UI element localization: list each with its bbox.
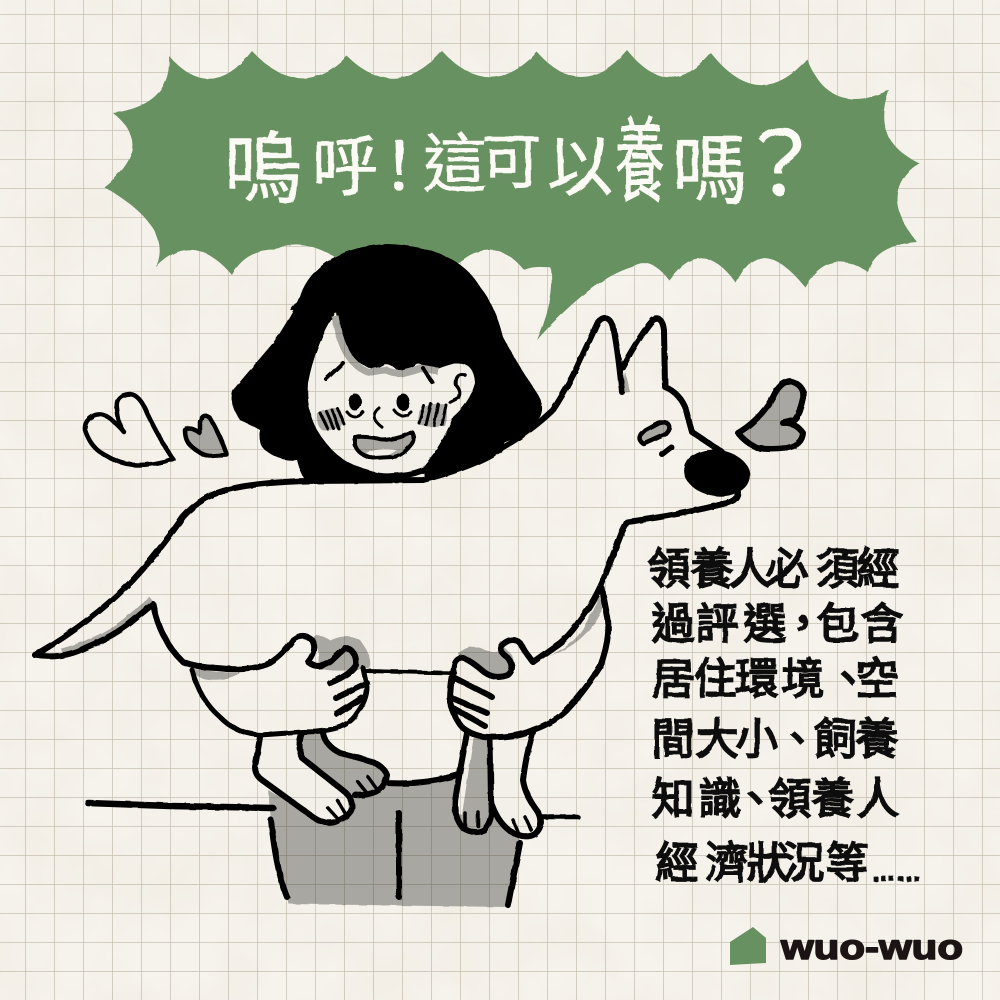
hair shadow on forehead: [335, 316, 438, 374]
body text: 間大小、飼養: [652, 716, 898, 764]
leg highlight small: [322, 735, 362, 760]
neck line: [372, 470, 424, 477]
title: 養: [615, 111, 665, 214]
face: [308, 312, 475, 473]
eye fill: [643, 428, 665, 438]
left paw toes: [328, 801, 345, 818]
title: 以: [547, 130, 613, 204]
dog back and ears: [35, 318, 622, 655]
left hand fingers: [336, 683, 367, 714]
body text: 過評選，包含: [652, 601, 904, 649]
mouth: [355, 432, 414, 458]
table line right: [543, 815, 578, 819]
teeth: [366, 449, 397, 457]
heart outline: [85, 394, 173, 465]
heart left small fill: [185, 416, 227, 456]
title: 呼: [312, 130, 378, 204]
left back paw toes: [358, 777, 376, 792]
left front leg: [255, 733, 352, 823]
title: ？: [736, 115, 824, 214]
under eyes and nose: [347, 408, 411, 427]
rear thigh shadow: [192, 669, 240, 680]
left hand shadow: [312, 635, 370, 671]
pot fill: [268, 775, 520, 907]
title: 可: [481, 129, 541, 196]
brows and eyes: [326, 363, 432, 382]
eye left: [348, 394, 362, 410]
left paw leg shadow: [300, 733, 386, 797]
mouth fill: [355, 432, 414, 458]
body text: 居住環境、空: [652, 656, 898, 704]
tail shadow: [62, 600, 152, 652]
body text: 經濟狀況等: [656, 840, 868, 888]
right paw leg: [455, 733, 492, 832]
right leg front: [490, 732, 541, 836]
right hand fingers: [452, 678, 492, 726]
right legs: [455, 732, 541, 836]
right cheek: [418, 404, 447, 427]
left leg front fill: [255, 733, 352, 823]
dog jaw and chest: [533, 492, 738, 662]
left cheek: [317, 408, 342, 431]
dog brow: [662, 447, 671, 454]
title: [224, 111, 824, 214]
dog second ear and snout: [622, 319, 722, 452]
hair top over bubble: [290, 244, 480, 310]
logo text: wuo-wuo: [780, 928, 963, 967]
right hand shadow: [458, 645, 514, 677]
right hand: [450, 588, 608, 737]
body text: 領養人必須經: [648, 546, 900, 594]
logo house: [730, 927, 766, 965]
dog nose: [685, 449, 749, 497]
eye right: [396, 394, 410, 410]
illustration lines: [35, 318, 803, 905]
dog eye: [640, 422, 670, 444]
illustration fills: [62, 244, 803, 907]
body text: ……: [871, 858, 921, 886]
body text: 知識、領養人: [652, 776, 900, 824]
leg highlight: [454, 733, 474, 815]
neck: [372, 469, 424, 481]
hair: [232, 244, 542, 480]
title: 嗎: [672, 129, 748, 214]
title: 嗚: [224, 125, 302, 213]
heart small: [185, 416, 227, 456]
belly between hands: [365, 671, 455, 673]
chest shadow: [548, 590, 603, 656]
heart right: [738, 381, 803, 449]
logo: [730, 927, 963, 967]
ear shadow: [621, 372, 630, 393]
tail underside and left hand: [35, 604, 356, 683]
body text: [648, 546, 921, 888]
title: ！: [366, 130, 432, 204]
speech bubble: [104, 50, 919, 340]
cheek hatching: [320, 404, 446, 429]
table line left: [88, 803, 273, 808]
right paw toes: [465, 812, 531, 832]
pot: [271, 775, 520, 905]
heart right fill: [738, 381, 803, 449]
title: 這: [423, 129, 487, 201]
left back paw: [323, 733, 387, 795]
left hand lower: [192, 668, 367, 735]
ear of girl: [450, 375, 465, 402]
